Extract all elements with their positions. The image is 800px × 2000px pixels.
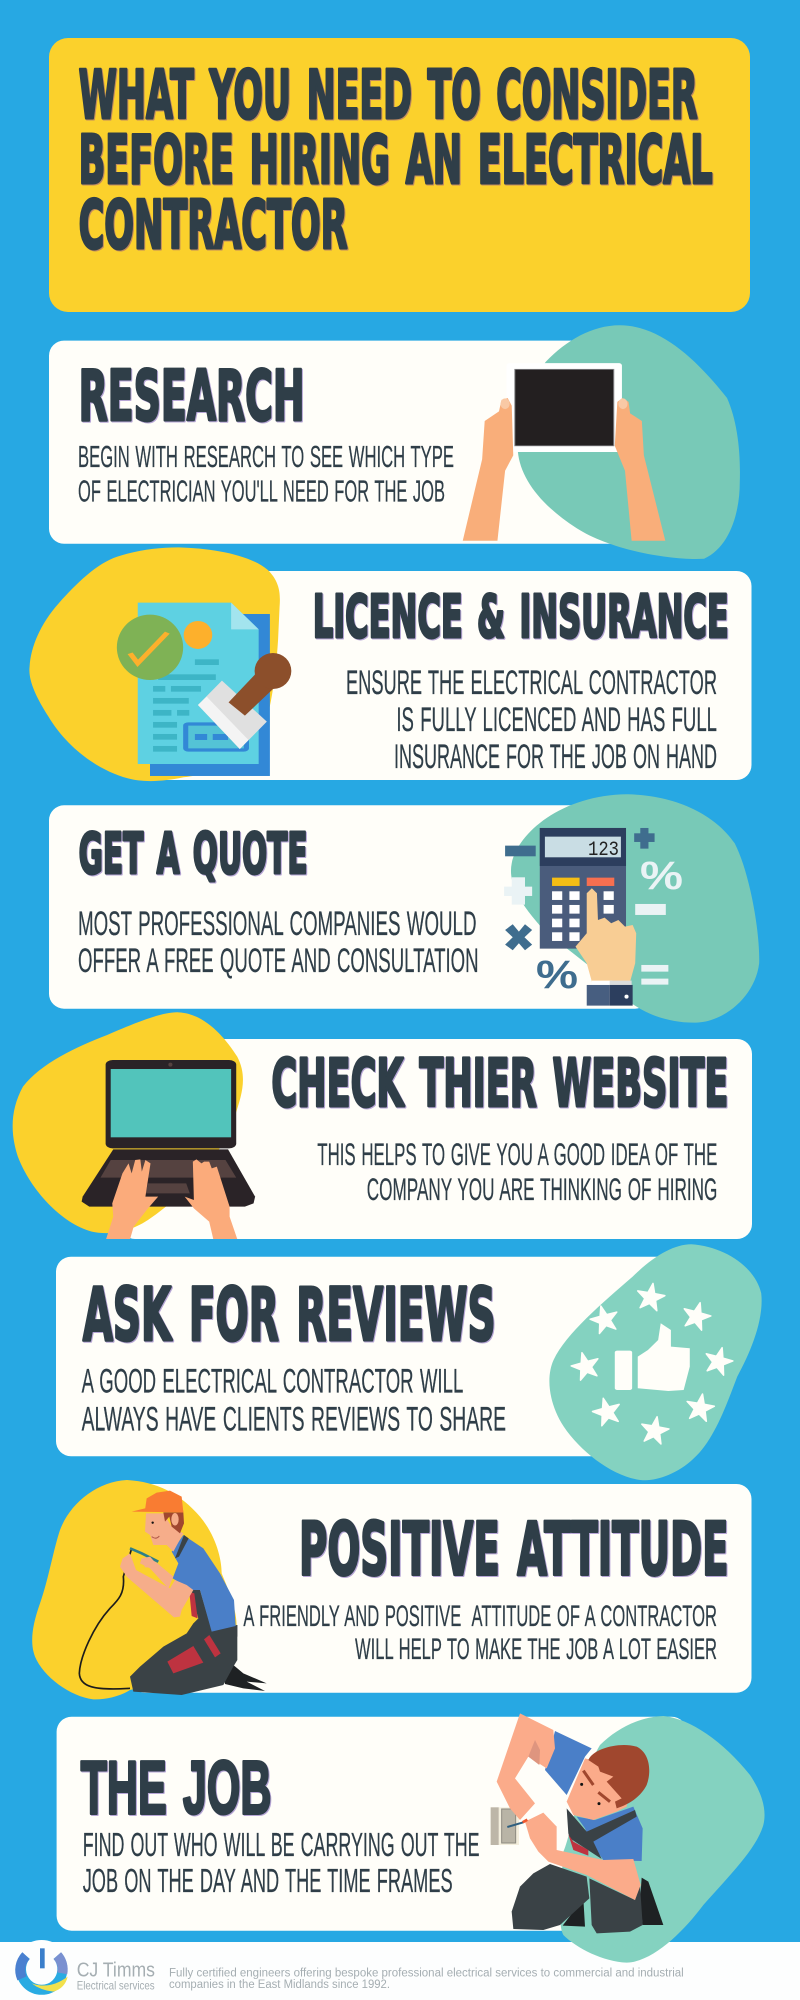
text: the job: JOB ON THE DAY AND THE TIME FRAMES (83, 1862, 453, 1899)
icon: percent white: % (640, 854, 683, 898)
text: get a quote (78, 905, 479, 980)
logo wordmark: Electrical services (77, 1978, 155, 1992)
panel: check their website (13, 1012, 752, 1239)
footer (0, 1940, 800, 2000)
blob and tablet illustration (463, 325, 740, 559)
text: ask for reviews: A GOOD ELECTRICAL CONTRACTOR WILL (82, 1363, 463, 1401)
footer description: Fully certified engineers offering bespoke professional electrical services to commercial and industrial (169, 1967, 684, 1979)
blob and document illustration (29, 547, 291, 781)
blob and kneeling electrician illustration (32, 1480, 267, 1699)
title (79, 56, 713, 264)
blob and thumbs-up illustration (549, 1244, 762, 1480)
icon: stars (569, 1281, 735, 1445)
text: research: BEGIN WITH RESEARCH TO SEE WHICH TYPE (78, 440, 454, 474)
calculator display: 123 (588, 839, 619, 862)
text: get a quote: OFFER A FREE QUOTE AND CONSULTATION (78, 942, 479, 980)
text: positive attitude (243, 1600, 717, 1666)
footer description (169, 1967, 684, 1991)
panel: the job (57, 1713, 765, 1963)
text: research: OF ELECTRICIAN YOU'LL NEED FOR THE JOB (78, 474, 445, 508)
icon: percent blue: % (536, 953, 578, 997)
text: the job: FIND OUT WHO WILL BE CARRYING OUT THE (83, 1826, 480, 1863)
logo wordmark: CJ Timms (77, 1960, 155, 1982)
heading: the job: THE JOB (81, 1746, 271, 1830)
panel: get a quote (49, 794, 759, 1023)
blob and calculator illustration (504, 794, 759, 1023)
title panel (49, 38, 750, 312)
text: get a quote: MOST PROFESSIONAL COMPANIES WOULD (78, 905, 476, 943)
text: licence and insurance (346, 664, 717, 776)
logo wordmark (77, 1960, 155, 1992)
footer description: companies in the East Midlands since 1992. (169, 1979, 390, 1991)
heading: research: RESEARCH (79, 357, 305, 437)
panel: ask for reviews (56, 1244, 762, 1480)
text: check thier website (317, 1136, 717, 1207)
panel: positive attitude (32, 1480, 751, 1699)
blob and electrician at switch illustration (491, 1713, 765, 1963)
text: research (78, 440, 454, 508)
text: ask for reviews (82, 1363, 506, 1439)
panel: licence and insurance (29, 547, 752, 781)
blob and laptop illustration (13, 1012, 255, 1239)
title: CONTRACTOR (79, 186, 348, 264)
panel: research (49, 325, 740, 559)
heading: get a quote: GET A QUOTE (79, 822, 308, 887)
logo: power symbol (13, 1940, 70, 1997)
text: the job (83, 1826, 480, 1899)
